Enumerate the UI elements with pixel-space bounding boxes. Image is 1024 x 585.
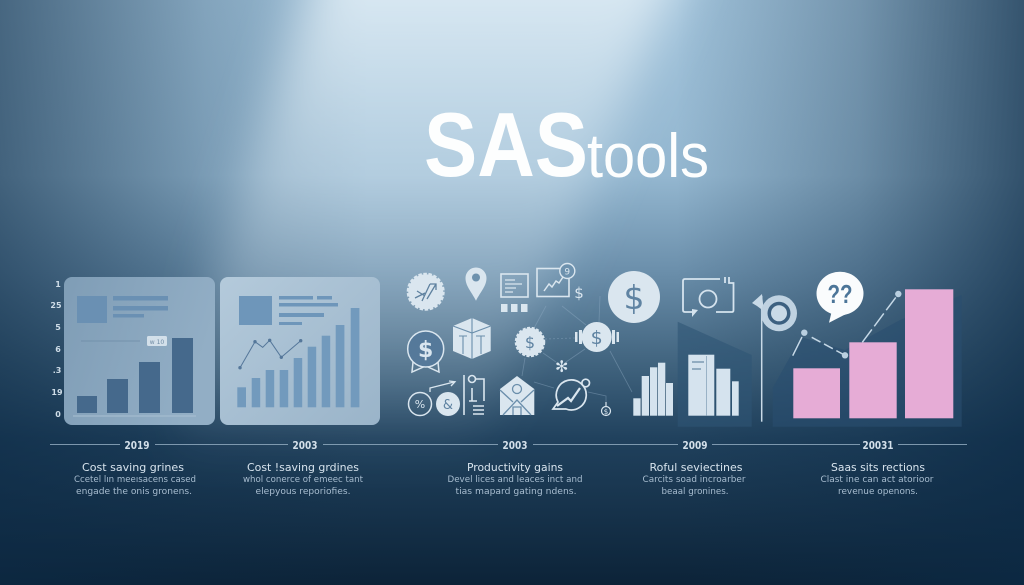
slider line and tag bbox=[81, 336, 167, 346]
column: 20031: revenue openons. bbox=[838, 487, 918, 497]
dashed trend line bbox=[793, 294, 898, 356]
bars bbox=[688, 355, 739, 416]
panel: bar and line chart card bbox=[220, 277, 380, 425]
y axis labels: .3 bbox=[53, 366, 61, 375]
icon: chat swoosh bbox=[553, 379, 590, 410]
panel: bar chart card left bbox=[64, 277, 215, 425]
column: 2019: engade the onis gronens. bbox=[76, 487, 192, 497]
icon: dollar medal with ribbon bbox=[408, 331, 444, 372]
y axis labels: 19 bbox=[51, 388, 63, 397]
column: 2003 productivity: Productivity gains bbox=[467, 462, 563, 474]
icon: dollar medal with ribbon: $ bbox=[418, 338, 433, 363]
column: 2003 cost saving bbox=[243, 440, 363, 497]
timeline bbox=[50, 444, 967, 446]
icon: image placeholder bbox=[239, 296, 272, 325]
icon: dollar coin with side bars: $ bbox=[591, 327, 603, 349]
text lines bbox=[113, 296, 168, 318]
icon: chart frame with badge bbox=[537, 264, 584, 302]
column: 2019: Cost saving grines bbox=[82, 462, 184, 474]
icon: map pin bbox=[466, 268, 486, 301]
column: 2003 productivity: Devel lices and leaces inct and bbox=[448, 475, 582, 485]
y axis labels: 0 bbox=[55, 410, 61, 419]
column: 2019 bbox=[74, 440, 196, 497]
icon: dollar coin with side bars bbox=[575, 322, 619, 352]
column: 2009 bbox=[642, 440, 746, 497]
icon: two coins and arrow bbox=[408, 381, 460, 416]
column: 2003 cost saving: whol conerce of emeec tant bbox=[243, 475, 363, 485]
title: SAS bbox=[424, 95, 588, 196]
column: 2003 productivity: 2003 bbox=[502, 440, 528, 452]
slider line and tag: w 10 bbox=[150, 339, 164, 346]
icon: two coins and arrow: % bbox=[415, 398, 425, 411]
column: 20031: Clast ine can act atorioor bbox=[820, 475, 934, 485]
text lines bbox=[279, 296, 338, 325]
icon: image placeholder bbox=[77, 296, 107, 323]
icon: dollar badge bbox=[516, 328, 544, 356]
panel: dark backdrop with building bars bbox=[678, 322, 752, 427]
chart: small light bars bbox=[633, 363, 673, 416]
connector lines bbox=[522, 296, 632, 404]
y axis labels bbox=[50, 280, 63, 419]
column: 2003 cost saving: elepyous reporiofies. bbox=[256, 487, 350, 497]
column: 20031 bbox=[820, 440, 934, 497]
icon: stopwatch bbox=[602, 402, 610, 416]
icon: chart frame with badge: $ bbox=[574, 284, 584, 302]
column: 2009: Carcits soad incroarber bbox=[642, 475, 746, 485]
y axis labels: 5 bbox=[55, 323, 61, 332]
column: 2003 cost saving: Cost !saving grdines bbox=[247, 462, 359, 474]
icon: package box bbox=[453, 318, 491, 359]
column: 2003 productivity bbox=[448, 440, 582, 497]
column: 2019: Ccetel lın meeısacens cased bbox=[74, 475, 196, 485]
y axis labels: 6 bbox=[55, 345, 61, 354]
column: 2019: 2019 bbox=[124, 440, 150, 452]
icon: chart frame with badge: 9 bbox=[564, 268, 570, 278]
y axis labels: 1 bbox=[55, 280, 61, 289]
icon: asterisk: ✻ bbox=[555, 357, 568, 376]
column: 20031: 20031 bbox=[862, 440, 894, 452]
column: 2009: 2009 bbox=[682, 440, 708, 452]
icon: dollar badge: $ bbox=[525, 333, 535, 352]
icon: large dollar coin bbox=[608, 271, 660, 323]
icon: large dollar coin: $ bbox=[624, 278, 644, 317]
icon: camera frame bbox=[683, 277, 734, 317]
icon: question speech bubble: ?? bbox=[828, 279, 852, 309]
chart: pink revenue bars bbox=[773, 289, 962, 427]
y axis labels: 25 bbox=[50, 301, 62, 310]
line chart bbox=[238, 339, 302, 369]
icon: envelope with house bbox=[500, 376, 534, 415]
bars bbox=[793, 289, 953, 418]
column: 2003 cost saving: 2003 bbox=[292, 440, 318, 452]
icon: question speech bubble bbox=[816, 272, 864, 323]
icon: ticket column bbox=[464, 375, 484, 415]
icon: number ten on pole bbox=[752, 294, 797, 422]
icon: two coins and arrow: & bbox=[443, 398, 453, 413]
panel: icon network bbox=[408, 264, 660, 416]
icon: scalloped badge with arrows bbox=[408, 274, 443, 309]
title: tools bbox=[587, 122, 709, 191]
column: 2009: Roful seviectines bbox=[650, 462, 742, 474]
title bbox=[424, 95, 709, 196]
column: 2009: beaal gronines. bbox=[662, 487, 728, 497]
column: 2003 productivity: tias mapard gating ndens. bbox=[456, 487, 576, 497]
bars bbox=[237, 308, 359, 407]
bars bbox=[77, 338, 193, 413]
column: 20031: Saas sits rections bbox=[831, 462, 925, 474]
icon: stopwatch: $ bbox=[604, 408, 608, 416]
icon: monitor bbox=[501, 274, 528, 312]
